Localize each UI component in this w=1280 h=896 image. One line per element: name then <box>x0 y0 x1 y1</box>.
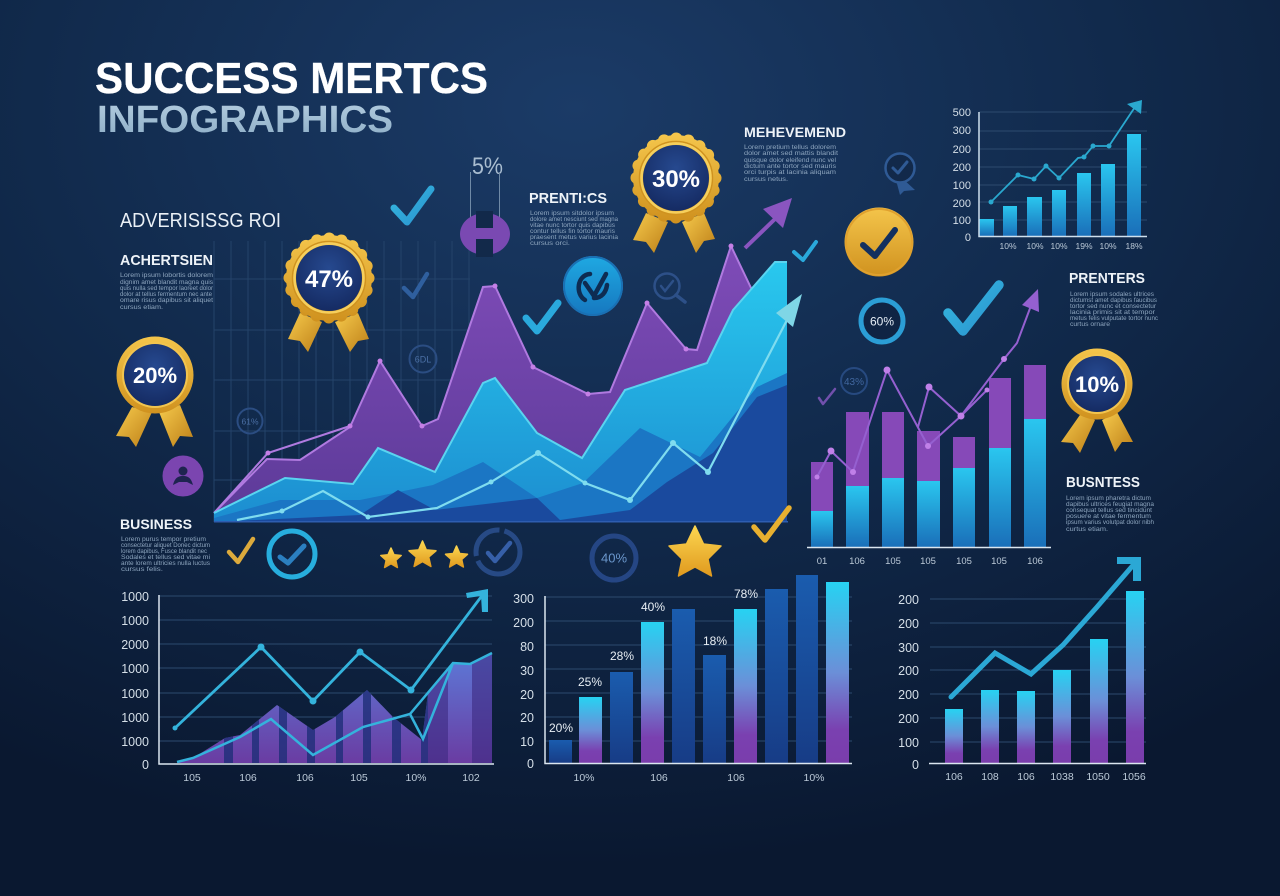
chart: stacked bars with line: 106 <box>849 556 865 567</box>
text block: achertsien: quis nulla sed tempor laoreet dolor <box>120 286 213 292</box>
text block: prentics: PRENTI:CS <box>529 190 607 207</box>
text block: achertsien: cursus etiam. <box>120 305 163 311</box>
chart: bottom-right bars and line: 100 <box>898 736 919 750</box>
chart: bottom-middle bars: 20 <box>520 688 534 702</box>
icon: magnifier <box>654 274 685 302</box>
icon: dim check <box>404 274 427 297</box>
chart: top-right bar and line: 200 <box>953 162 971 174</box>
chart: bottom-middle bars: 10% <box>573 772 595 784</box>
text block: busntess: posuere at vitae fermentum <box>1066 514 1151 520</box>
chart: bottom-right bars and line: 200 <box>898 617 919 631</box>
chart: bottom-left area and lines: 1000 <box>121 590 149 604</box>
text block: prentics: dolore amet nesciunt sed magna <box>530 217 619 223</box>
icon: purple growth arrow <box>745 198 792 248</box>
text block: business: ante lorem ultricies nulla luctus <box>121 561 210 567</box>
text block: prenters: metus felis vulputate tortor nunc <box>1070 316 1158 322</box>
text block: prentics: Lorem ipsum sitdolor ipsum <box>530 211 614 217</box>
icon: 5% purple gauge <box>460 153 510 257</box>
icon: yellow check right <box>754 508 789 540</box>
chart: bottom-right bars and line: 106 <box>945 771 963 783</box>
heading: advertising ROI: ADVERISISSG ROI <box>120 210 281 232</box>
chart: bottom-middle bars: 20% <box>549 721 573 735</box>
chart: bottom-middle bars: 300 <box>513 592 534 606</box>
chart: top-right bar and line: 10% <box>1050 241 1068 251</box>
chart: bottom-right bars and line: 200 <box>898 593 919 607</box>
text block: busntess: BUSNTESS <box>1066 474 1140 491</box>
chart: bottom-middle bars: 200 <box>513 616 534 630</box>
icon: gold check circle <box>844 208 914 276</box>
arrow: bottom-left chart <box>466 589 488 612</box>
badge: 47% <box>286 235 372 352</box>
text block: achertsien: Lorem ipsum lobortis dolorem <box>120 273 213 279</box>
text block: business: BUSINESS <box>120 516 192 532</box>
text block: prenters: dictumst amet dapibus faucibus <box>1070 298 1157 304</box>
chart: bottom-middle bars: 30 <box>520 664 534 678</box>
chart: bottom-middle bars: 10 <box>520 735 534 749</box>
chart: top-right bar and line: 100 <box>953 215 971 227</box>
chart: top-right bar and line: 18% <box>1125 241 1143 251</box>
icon: cyan circle check <box>269 531 315 577</box>
chart: bottom-right bars and line: 1056 <box>1122 771 1146 783</box>
chart: bottom-right bars and line: 106 <box>1017 771 1035 783</box>
icon: large star <box>669 526 721 576</box>
arrow: top-right chart <box>1127 100 1142 114</box>
chart: bottom-middle bars: 25% <box>578 675 602 689</box>
chart: bottom-right bars and line <box>898 557 1146 783</box>
chart: stacked bars with line: 01 <box>817 556 827 567</box>
icon: dim ring check <box>476 530 520 574</box>
chart: top-right bar and line: 19% <box>1075 241 1093 251</box>
text block: prentics: praesent metus varius lacinia <box>530 235 619 241</box>
chart: top-right bar and line: 200 <box>953 144 971 156</box>
chart: bottom-right bars and line: 200 <box>898 664 919 678</box>
chart: bottom-right bars and line: 1050 <box>1086 771 1110 783</box>
chart: stacked bars with line: 105 <box>885 556 901 567</box>
arrow: bottom-right chart <box>1117 557 1141 581</box>
icon: 60% ring: 60% <box>870 314 894 328</box>
chart: bottom-right bars and line: 0 <box>912 758 919 772</box>
chart: bottom-middle bars: 20 <box>520 711 534 725</box>
title: SUCCESS MERTCS <box>95 54 488 103</box>
chart: bottom-right bars and line: 300 <box>898 641 919 655</box>
text block: prenters: Lorem ipsum sodales ultrices <box>1070 292 1154 298</box>
icon: 43% ring <box>841 368 867 394</box>
icon: small check <box>794 242 816 260</box>
text block: busntess: Lorem ipsum pharetra dictum <box>1066 496 1151 502</box>
text block: mehevemend: MEHEVEMEND <box>744 124 846 140</box>
icon: 5% purple gauge: 5% <box>472 153 503 180</box>
chart: stacked bars with line: 106 <box>1027 556 1043 567</box>
chart: bottom-middle bars: 10% <box>803 772 825 784</box>
icon: cyan check top <box>394 189 431 222</box>
icon: 6DL ring: 6DL <box>415 354 431 364</box>
icon: 43% ring: 43% <box>844 377 864 388</box>
chart: bottom-middle bars: 18% <box>703 634 727 648</box>
text block: busntess: ipsum varius volutpat dolor nibh <box>1066 520 1154 526</box>
icon: check beside blue circle <box>526 303 558 331</box>
chart: bottom-middle bars: 80 <box>520 640 534 654</box>
text block: business: cursus felis. <box>121 567 163 573</box>
chart: bottom-right bars and line: 1038 <box>1050 771 1074 783</box>
chart: bottom-left area and lines: 10% <box>405 772 427 784</box>
chart: bottom-left area and lines: 1000 <box>121 735 149 749</box>
chart: stacked bars with line: 105 <box>956 556 972 567</box>
text block: business <box>120 516 210 573</box>
icon: 6DL ring <box>410 346 436 372</box>
main area chart <box>214 241 802 522</box>
chart: bottom-right bars and line: 108 <box>981 771 999 783</box>
text block: achertsien: omare risus dapibus sit aliquet <box>120 298 213 304</box>
chart: bottom-left area and lines <box>121 589 494 784</box>
text block: business: Sodales et tellus sed vitae mi <box>121 555 210 561</box>
badge: 10% <box>1061 348 1133 453</box>
chart: bottom-middle bars: 40% <box>641 600 665 614</box>
text block: prentics: cursus orci. <box>530 241 570 247</box>
text block: mehevemend: orci turpis at lacinia aliquam <box>744 170 836 176</box>
chart: bottom-left area and lines: 102 <box>462 772 480 784</box>
chart: bottom-middle bars: 0 <box>527 757 534 771</box>
chart: bottom-right bars and line: 200 <box>898 688 919 702</box>
text block: prentics <box>529 190 619 247</box>
chart: bottom-right bars and line: 200 <box>898 712 919 726</box>
icon: three stars <box>381 541 468 568</box>
icon: ribbon check badge <box>886 154 915 195</box>
badge: 30% <box>633 135 719 253</box>
chart: top-right bar and line: 200 <box>953 198 971 210</box>
badge: 20%: 20% <box>133 363 177 388</box>
chart: stacked bars with line: 105 <box>991 556 1007 567</box>
chart: bottom-left area and lines: 1000 <box>121 687 149 701</box>
title <box>95 54 488 141</box>
text block: busntess <box>1066 474 1155 533</box>
chart: top-right bar and line: 10% <box>999 241 1017 251</box>
icon: yellow check left <box>229 539 253 562</box>
chart: bottom-left area and lines: 2000 <box>121 638 149 652</box>
chart: bottom-middle bars: 106 <box>650 772 668 784</box>
text block: prentics: vitae nunc tortor quis dapibus <box>530 223 615 229</box>
chart: bottom-left area and lines: 106 <box>296 772 314 784</box>
chart: bottom-left area and lines: 1000 <box>121 711 149 725</box>
chart: stacked bars with line: 105 <box>920 556 936 567</box>
title: INFOGRAPHICS <box>97 99 393 141</box>
chart: top-right bar and line: 10% <box>1026 241 1044 251</box>
text block: achertsien: ACHERTSIEN <box>120 252 213 269</box>
text block: busntess: consequat tellus sed tincidunt <box>1066 508 1152 514</box>
chart: top-right bar and line: 100 <box>953 180 971 192</box>
icon: small purple check <box>819 389 835 404</box>
icon: purple user <box>162 456 204 496</box>
chart: top-right bar and line <box>953 100 1147 251</box>
icon: blue circle glyph <box>563 256 623 316</box>
chart: stacked bars with line <box>807 289 1051 567</box>
text block: business: Lorem purus tempor pretium <box>121 537 206 543</box>
text block: achertsien: dignim amet blandit magna quis <box>120 280 213 286</box>
text block: busntess: curtus etiam. <box>1066 527 1108 533</box>
text block: prenters: curtus ornare <box>1070 322 1111 328</box>
chart: bottom-left area and lines: 105 <box>183 772 201 784</box>
text block: mehevemend: Lorem pretium tellus dolorem <box>744 145 836 151</box>
icon: 40% ring: 40% <box>601 550 627 566</box>
text block: mehevemend: dolor amet sed mattis blandit <box>744 151 838 157</box>
arrow: chart growth head <box>776 294 802 327</box>
icon: 61% ring <box>238 408 262 434</box>
chart: bottom-middle bars: 78% <box>734 587 758 601</box>
text block: achertsien: dolor at tellus fermentum nec ante <box>120 292 213 298</box>
badge: 10%: 10% <box>1075 372 1119 397</box>
chart: top-right bar and line: 10% <box>1099 241 1117 251</box>
text block: prenters: lacinia primis sit at tempor <box>1070 310 1155 316</box>
chart: bottom-middle bars: 106 <box>727 772 745 784</box>
chart: bottom-middle bars: 28% <box>610 649 634 663</box>
badge: 20% <box>116 336 194 447</box>
icon: 60% ring <box>861 300 903 342</box>
chart: bottom-left area and lines: 1000 <box>121 614 149 628</box>
chart: bottom-left area and lines: 0 <box>142 758 149 772</box>
badge: 47%: 47% <box>305 266 353 293</box>
text block: busntess: dapibus ultrices feugiat magna <box>1066 502 1155 508</box>
chart: bottom-left area and lines: 1000 <box>121 662 149 676</box>
arrow: stacked chart <box>1022 289 1039 312</box>
text block: prentics: contur tellus fin tortor mauris <box>530 229 615 235</box>
text block: business: lorem dapibus, Fusce blandit nec <box>121 549 207 555</box>
chart: bottom-middle bars <box>513 575 852 784</box>
text block: mehevemend: quisque dolor eleifend nunc vel <box>744 158 836 164</box>
chart: top-right bar and line: 500 <box>953 107 971 119</box>
chart: bottom-left area and lines: 105 <box>350 772 368 784</box>
icon: large check <box>948 285 999 331</box>
text block: business: consectetur aliquet Donec dictum <box>121 543 210 549</box>
text block: prenters <box>1069 270 1158 328</box>
text block: prenters: tortor sed nunc et consectetur <box>1070 304 1156 310</box>
chart: bottom-left area and lines: 106 <box>239 772 257 784</box>
text block: mehevemend: cursus netus. <box>744 177 788 183</box>
text block: achertsien <box>120 252 213 311</box>
text block: prenters: PRENTERS <box>1069 270 1145 287</box>
text block: mehevemend: dictum ante tortor sed mauris <box>744 164 836 170</box>
icon: 61% ring: 61% <box>241 416 259 426</box>
chart: top-right bar and line: 300 <box>953 125 971 137</box>
text block: mehevemend <box>744 124 846 183</box>
icon: 40% ring <box>592 536 636 580</box>
badge: 30%: 30% <box>652 166 700 193</box>
chart: top-right bar and line: 0 <box>965 232 971 244</box>
